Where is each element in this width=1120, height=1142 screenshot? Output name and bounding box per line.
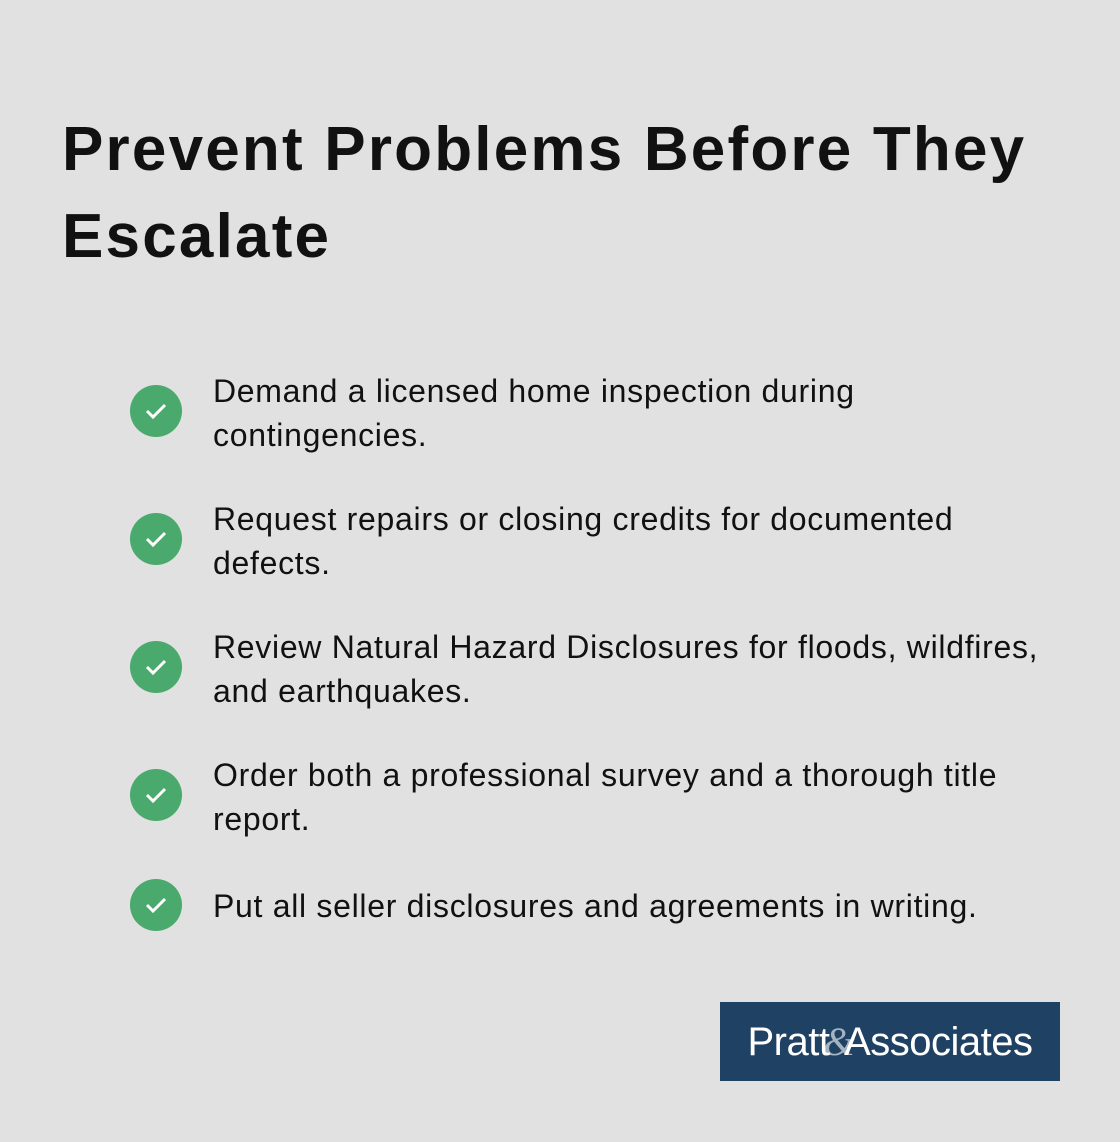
icon: check (130, 879, 182, 931)
text: Request repairs or closing credits for documented (213, 501, 953, 537)
text: report. (213, 801, 310, 837)
text: Demand a licensed home inspection during (213, 373, 855, 409)
logo (720, 1002, 1060, 1081)
text: contingencies. (213, 417, 427, 453)
title (62, 115, 1026, 271)
item 3 (130, 629, 1038, 709)
text: Review Natural Hazard Disclosures for floods, wildfires, (213, 629, 1038, 665)
title: Escalate (62, 202, 331, 271)
text (213, 501, 953, 581)
item 1 (130, 373, 855, 453)
icon: check (130, 385, 182, 437)
text (213, 757, 997, 837)
text: Put all seller disclosures and agreements in writing. (213, 888, 978, 924)
text (213, 373, 855, 453)
text: and earthquakes. (213, 673, 472, 709)
icon: check (130, 641, 182, 693)
text (213, 629, 1038, 709)
logo: Pratt&Associates (747, 1019, 1033, 1064)
text: defects. (213, 545, 331, 581)
item 4 (130, 757, 997, 837)
title: Prevent Problems Before They (62, 115, 1026, 184)
item 2 (130, 501, 953, 581)
item 5 (130, 879, 978, 931)
icon: check (130, 513, 182, 565)
icon: check (130, 769, 182, 821)
text: Order both a professional survey and a thorough title (213, 757, 997, 793)
